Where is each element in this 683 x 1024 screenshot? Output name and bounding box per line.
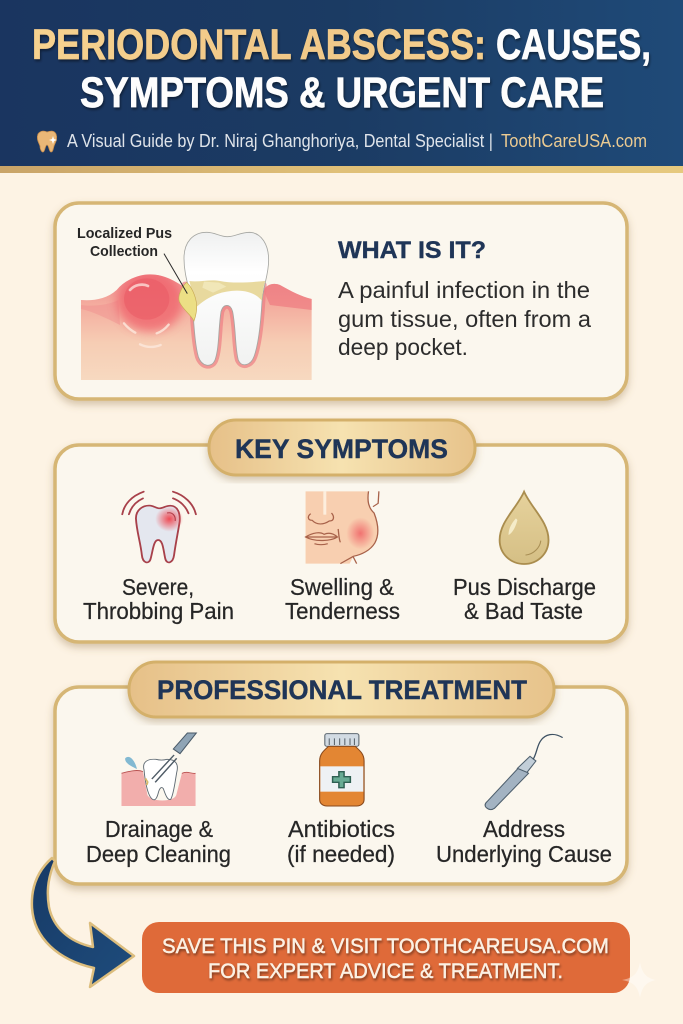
label: severe throbbing pain: [83, 574, 234, 624]
illustration: tooth with abscess: [81, 232, 312, 380]
label: antibiotics: Antibiotics: [288, 816, 395, 842]
text: definition: gum tissue, often from a: [338, 306, 591, 332]
title: CAUSES,: [496, 21, 651, 69]
leader line: [164, 254, 187, 294]
label: drainage and deep cleaning: Deep Cleaning: [86, 841, 231, 867]
heading pill: key symptoms: [209, 420, 475, 475]
decorative sparkle: [622, 962, 656, 998]
label: pus discharge and bad taste: Pus Discharge: [453, 574, 596, 600]
title: [32, 21, 651, 117]
label: pus discharge and bad taste: & Bad Taste: [464, 598, 583, 624]
icon: drainage: [121, 733, 196, 806]
heading pill: professional treatment: [129, 662, 554, 717]
icon: gold tooth: [37, 131, 57, 152]
subtitle: ToothCareUSA.com: [501, 131, 647, 151]
text: definition: deep pocket.: [338, 334, 468, 360]
pus pocket: [179, 282, 197, 321]
call to action button: SAVE THIS PIN & VISIT TOOTHCAREUSA.COM: [162, 935, 609, 958]
panel: what is it: [55, 203, 627, 399]
call to action button: [142, 922, 630, 993]
label: severe throbbing pain: Throbbing Pain: [83, 598, 234, 624]
label: localized pus collection: Collection: [90, 243, 158, 260]
label: address underlying cause: [436, 816, 612, 867]
label: localized pus collection: Localized Pus: [77, 225, 172, 242]
label: swelling and tenderness: Tenderness: [285, 598, 400, 624]
tooth: [184, 232, 269, 365]
title: PERIODONTAL ABSCESS:: [32, 21, 486, 69]
call to action button: FOR EXPERT ADVICE & TREATMENT.: [208, 960, 563, 983]
label: antibiotics: [287, 816, 395, 867]
header banner: [0, 0, 683, 173]
root halo: [185, 285, 263, 365]
heading: what is it: WHAT IS IT?: [338, 237, 486, 264]
panel: professional treatment: [55, 662, 627, 884]
label: address underlying cause: Underlying Cause: [436, 841, 612, 867]
label: address underlying cause: Address: [483, 816, 565, 842]
label: localized pus collection: [77, 225, 172, 260]
icon: swollen face: [306, 491, 379, 564]
panel: key symptoms: [55, 420, 627, 642]
heading pill: key symptoms: KEY SYMPTOMS: [235, 434, 448, 464]
tartar band: [189, 280, 265, 310]
label: drainage and deep cleaning: [86, 816, 231, 867]
label: pus discharge and bad taste: [453, 574, 596, 624]
heading pill: professional treatment: PROFESSIONAL TREATMENT: [157, 675, 527, 705]
label: severe throbbing pain: Severe,: [122, 574, 194, 600]
abscess swelling: [117, 272, 183, 347]
label: swelling and tenderness: Swelling &: [290, 574, 394, 600]
icon: antibiotics bottle: [320, 734, 364, 806]
icon: dental probe: [485, 734, 562, 810]
title: SYMPTOMS & URGENT CARE: [80, 69, 604, 117]
label: drainage and deep cleaning: Drainage &: [105, 816, 213, 842]
gum tissue: [81, 274, 312, 380]
arrow: pointing to call to action: [32, 858, 134, 987]
text: definition: A painful infection in the: [338, 277, 590, 303]
subtitle: A Visual Guide by Dr. Niraj Ghanghoriya, Dental Specialist |: [67, 131, 493, 151]
label: antibiotics: (if needed): [287, 841, 395, 867]
label: swelling and tenderness: [285, 574, 400, 624]
icon: pus drop: [500, 492, 549, 564]
icon: throbbing tooth: [122, 492, 196, 562]
text: definition: [338, 277, 591, 360]
